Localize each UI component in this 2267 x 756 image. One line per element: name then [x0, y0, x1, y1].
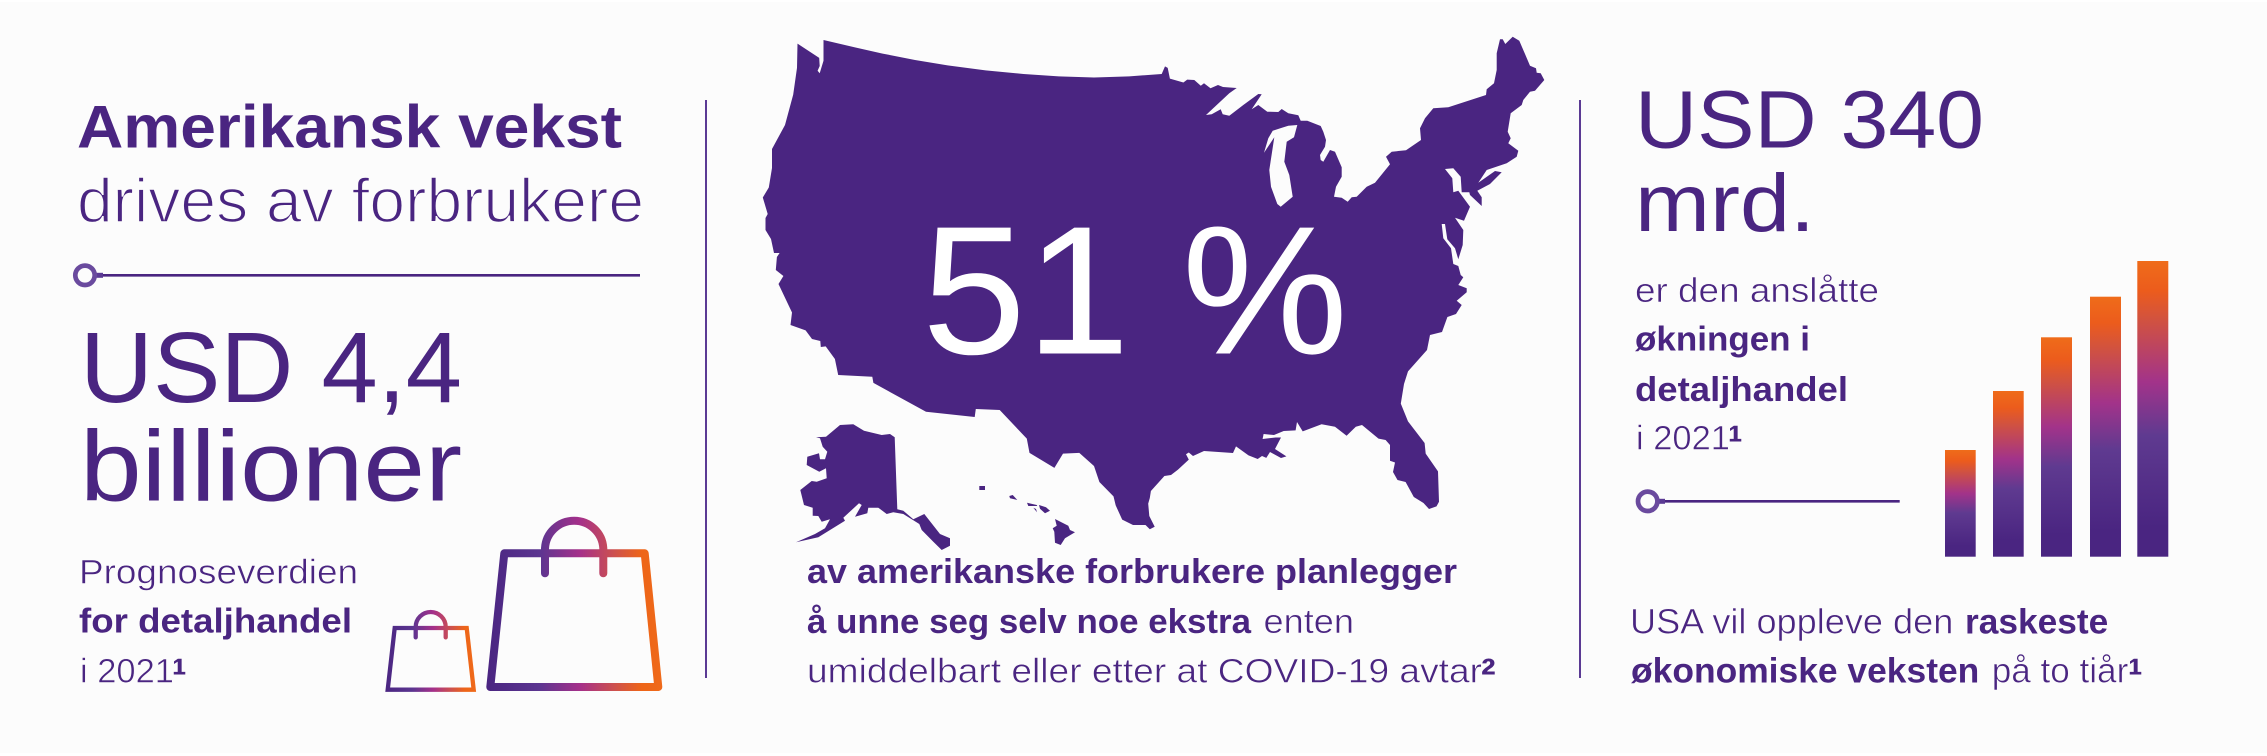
big number: USD 4,4 billioner: billioner: [80, 411, 462, 523]
text block: map description: å unne seg selv noe ekstra: [807, 603, 1252, 641]
text block: map description: enten: [1264, 603, 1354, 641]
text block: growth description: i 2021: [1636, 420, 1730, 458]
icon: small shopping bag: [388, 612, 474, 690]
big number: 51 %: 51 %: [922, 188, 1348, 392]
text block: fastest economic growth: på to tiår: [1992, 652, 2129, 691]
text block: fastest economic growth: ¹: [2128, 651, 2143, 700]
text block: forecast description: ¹: [172, 650, 187, 699]
text block: fastest economic growth: raskeste: [1965, 602, 2108, 641]
divider right: [1579, 100, 1581, 678]
text block: map description: av amerikanske forbrukere planlegger: [807, 553, 1457, 591]
icon: large shopping bag: [490, 521, 658, 687]
text block: growth description: er den anslåtte: [1635, 272, 1879, 310]
panel: left, total retail forecast: [75, 94, 658, 699]
timeline divider with ring: [1638, 492, 1900, 511]
map: Hawaii: [979, 486, 1075, 545]
text block: fastest economic growth: økonomiske veksten: [1631, 652, 1979, 691]
map: Alaska: [796, 424, 950, 550]
text block: growth description: [1635, 272, 1879, 467]
text block: forecast description: for detaljhandel: [79, 603, 352, 641]
big number: USD 340 mrd.: [1635, 74, 1984, 249]
panel: center, consumer map: [763, 37, 1544, 700]
text block: forecast description: Prognoseverdien: [79, 554, 358, 592]
heading: [77, 94, 644, 236]
heading: drives av forbrukere: [77, 167, 644, 236]
text block: growth description: økningen i: [1635, 321, 1810, 359]
text block: map description: ²: [1481, 651, 1496, 700]
big number: USD 340 mrd.: mrd.: [1635, 158, 1815, 249]
heading: Amerikansk vekst: [77, 94, 622, 160]
text block: fastest economic growth: USA vil oppleve den: [1630, 602, 1953, 641]
text block: fastest economic growth: [1630, 602, 2143, 700]
text block: growth description: detaljhandel: [1635, 371, 1848, 409]
timeline divider with ring: [75, 266, 640, 285]
text block: forecast description: i 2021: [80, 652, 174, 690]
panel: right, retail growth: [1630, 74, 2168, 700]
map of the United States: [763, 37, 1544, 529]
big number: USD 340 mrd.: USD 340: [1635, 74, 1984, 166]
big number: USD 4,4 billioner: [80, 312, 462, 523]
bar chart: rising retail growth: [1945, 261, 2168, 557]
text block: map description: umiddelbart eller etter at COVID-19 avtar: [807, 653, 1482, 691]
text block: forecast description: [79, 554, 358, 699]
text block: growth description: ¹: [1728, 418, 1743, 467]
big number: USD 4,4 billioner: USD 4,4: [80, 312, 462, 424]
divider left: [705, 100, 707, 678]
text block: map description: [807, 553, 1496, 700]
